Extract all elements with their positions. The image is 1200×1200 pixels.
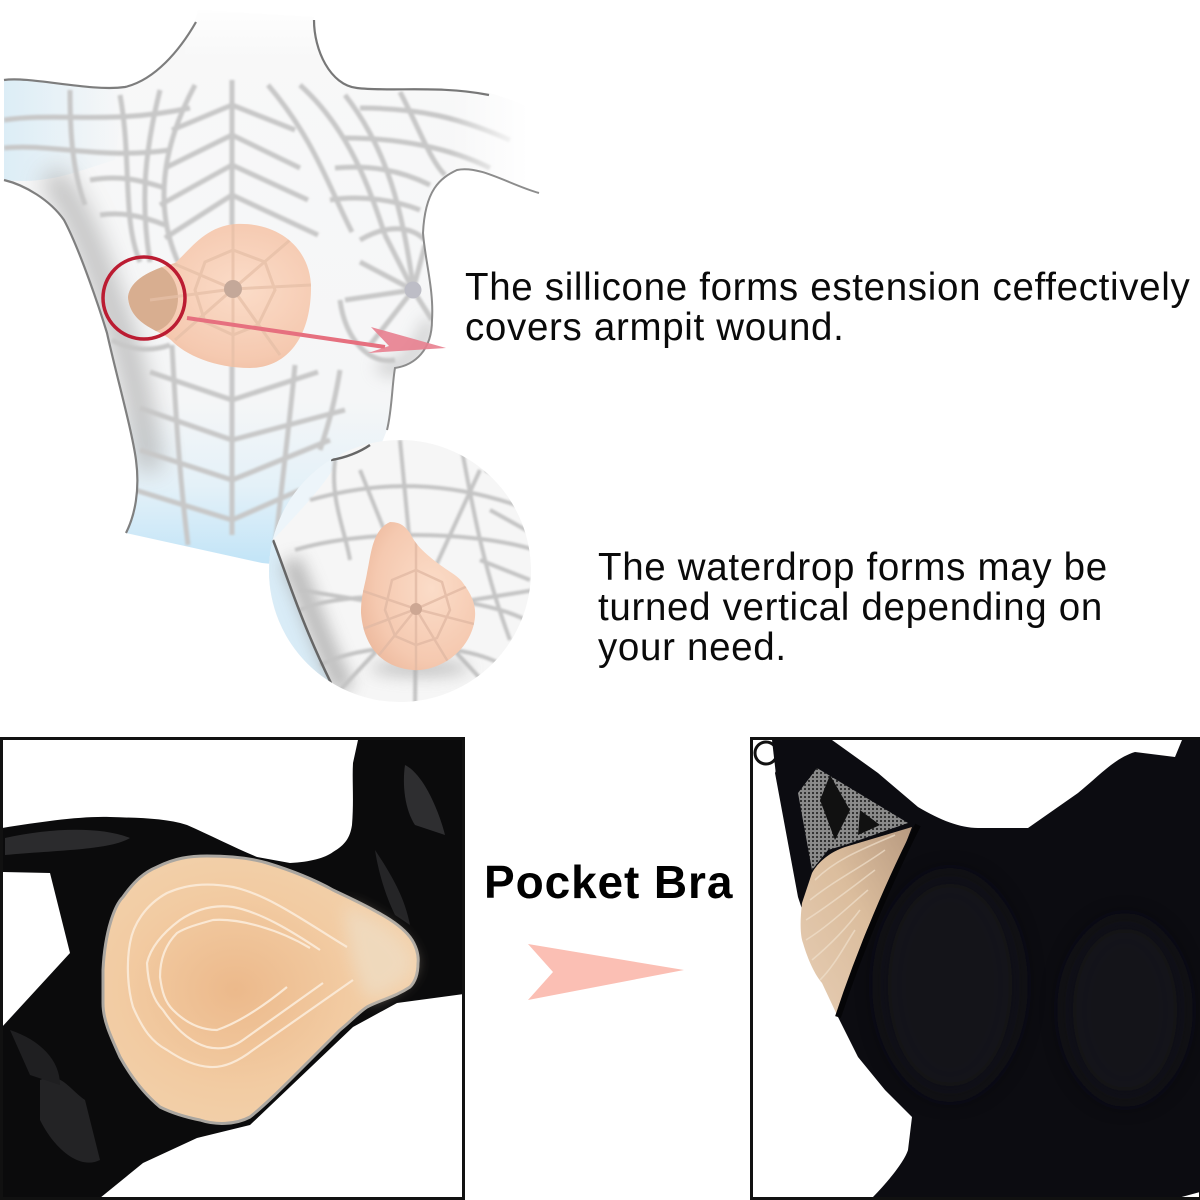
callout: waterdrop vertical: turned vertical depending on	[598, 586, 1103, 629]
bra fabric	[2, 740, 464, 1198]
red highlight circle	[103, 257, 185, 339]
pocket seam	[838, 825, 918, 1017]
silicone visible in pocket	[801, 827, 912, 1017]
right nipple marker	[404, 282, 422, 298]
silicone form	[103, 856, 418, 1123]
lace panel	[798, 768, 908, 870]
red arrow	[187, 318, 446, 353]
torso mannequin	[4, 0, 555, 570]
heading: pocket bra: Pocket Bra	[484, 856, 733, 908]
photo panel: form on bra	[2, 738, 464, 1198]
inset circle showing vertical form	[262, 440, 535, 710]
main silicone form with armpit extension	[122, 224, 311, 368]
callout: silicone extension: The sillicone forms estension ceffectively	[465, 266, 1190, 309]
callout: waterdrop vertical	[598, 546, 1108, 669]
strap ring	[755, 742, 777, 764]
callout: silicone extension	[465, 266, 1190, 349]
left nipple marker	[224, 280, 242, 298]
bra fabric	[775, 740, 1200, 1198]
callout: waterdrop vertical: your need.	[598, 626, 787, 669]
callout: waterdrop vertical: The waterdrop forms may be	[598, 546, 1108, 589]
callout: silicone extension: covers armpit wound.	[465, 306, 845, 349]
photo panel: form inside pocket bra	[752, 738, 1200, 1198]
pink arrow	[528, 944, 684, 1000]
